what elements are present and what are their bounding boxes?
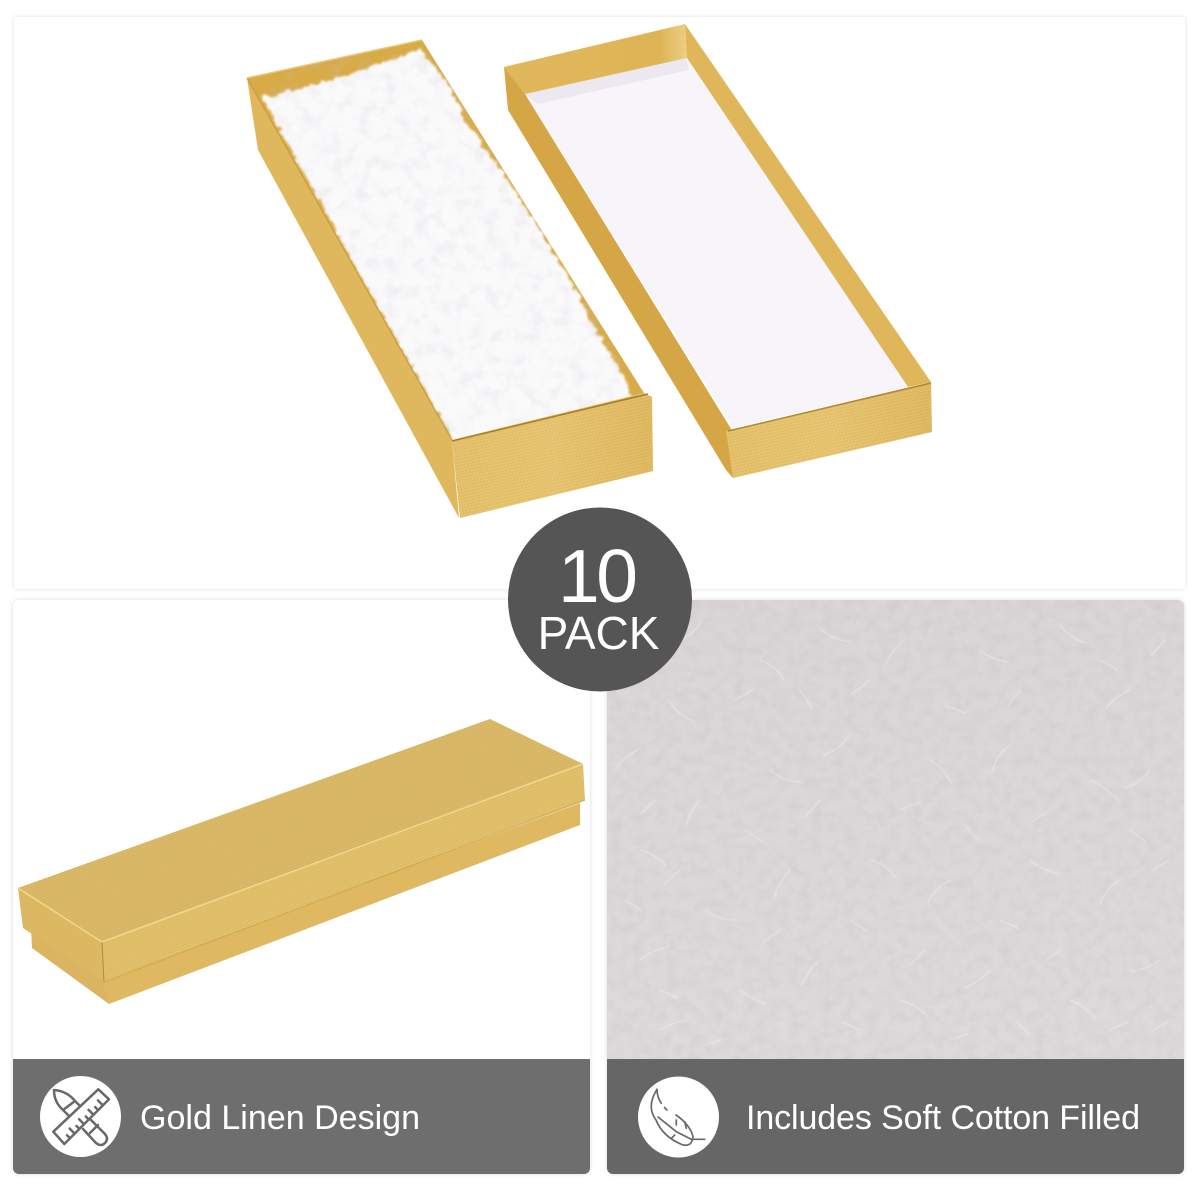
caption: gold linen design: Gold Linen Design	[140, 1099, 420, 1137]
icon: feather	[638, 1076, 719, 1158]
panel: gold linen design	[13, 600, 590, 1174]
panel: soft cotton	[607, 600, 1184, 1174]
photo: open box lid	[504, 24, 932, 478]
panel: open boxes photo	[14, 17, 1185, 589]
caption: soft cotton: Includes Soft Cotton Filled	[746, 1099, 1140, 1137]
icon: ruler and pencil	[40, 1076, 121, 1157]
badge: 10 pack: 10	[558, 534, 635, 618]
caption bar: soft cotton	[607, 1059, 1184, 1174]
photo: cotton texture	[607, 600, 1184, 1065]
caption bar: gold linen design	[13, 1059, 590, 1174]
photo: box base filled with cotton	[247, 40, 653, 518]
badge: 10 pack: PACK	[538, 607, 660, 659]
photo: closed gold box	[18, 719, 585, 1004]
badge: 10 pack	[508, 508, 692, 692]
